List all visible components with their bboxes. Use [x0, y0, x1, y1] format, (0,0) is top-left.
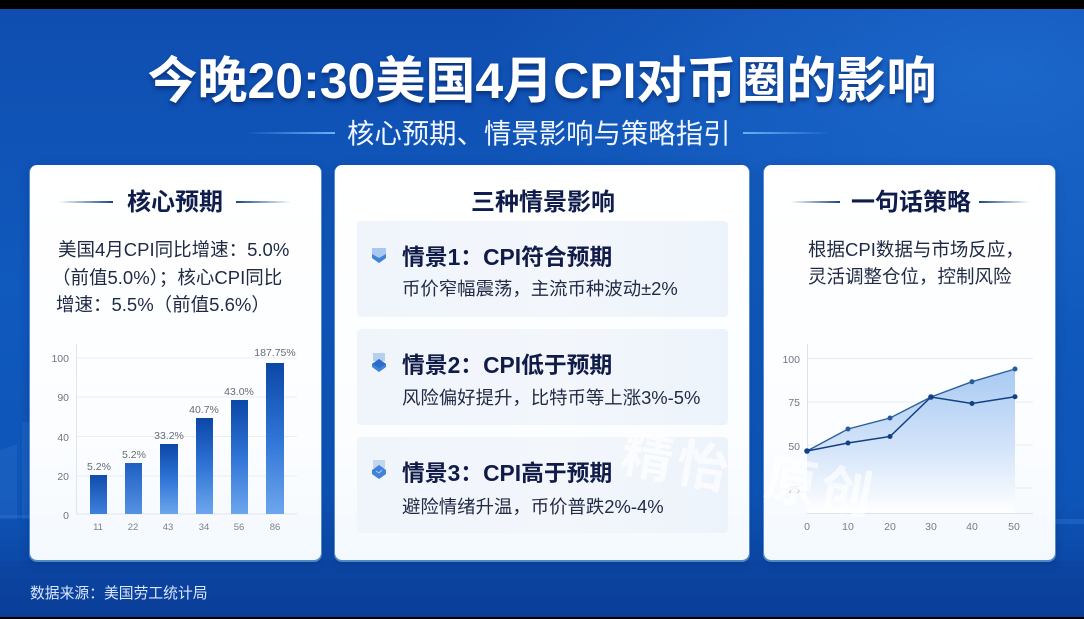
subtitle: 核心预期、情景影响与策略指引 — [347, 118, 730, 149]
bar value labels: 43.0% — [224, 386, 254, 398]
x axis labels: 0 — [804, 521, 810, 533]
text: forecast line 3: 增速：5.5%（前值5.6%） — [56, 294, 270, 315]
bar value labels: 33.2% — [154, 430, 184, 442]
y axis labels: 20 — [57, 471, 69, 483]
x axis labels: 43 — [163, 522, 173, 533]
bar value labels: 5.2% — [122, 449, 146, 461]
x axis labels: 34 — [199, 522, 209, 533]
x axis labels: 40 — [966, 521, 978, 533]
x axis labels: 22 — [128, 522, 138, 533]
y axis labels: 40 — [57, 432, 69, 444]
watermark: 精怡 原创 — [616, 425, 881, 527]
y axis labels: 50 — [788, 441, 800, 453]
bar value labels: 187.75% — [254, 347, 296, 359]
x axis labels: 86 — [270, 522, 280, 533]
y axis labels — [51, 353, 69, 522]
text: forecast line 2: （前值5.0%）；核心CPI同比 — [52, 267, 282, 288]
upper line series — [807, 366, 1018, 451]
x axis labels: 56 — [234, 522, 244, 533]
title: 今晚20:30美国4月CPI对币圈的影响 — [147, 53, 937, 109]
line chart — [782, 344, 1033, 533]
scenario 1 — [357, 221, 728, 317]
y axis labels: 25 — [788, 484, 800, 496]
scenario 2 description: 风险偏好提升，比特币等上涨3%-5% — [402, 387, 700, 408]
bar value labels — [87, 347, 296, 473]
bars — [90, 363, 284, 514]
scenario 3 title: 情景3：CPI高于预期 — [402, 460, 612, 486]
icon: scenario 1 — [372, 248, 386, 263]
panel: core expectations — [30, 165, 321, 560]
x axis labels: 11 — [93, 522, 103, 533]
y axis labels: 100 — [782, 354, 800, 366]
bar value labels: 5.2% — [87, 461, 111, 473]
text: forecast line 1: 美国4月CPI同比增速：5.0% — [58, 239, 289, 260]
scenario 3 — [357, 437, 728, 533]
x axis labels: 20 — [884, 521, 896, 533]
icon: scenario 2 — [372, 353, 386, 372]
x axis labels — [93, 522, 280, 533]
panel: one-line strategy — [764, 165, 1055, 560]
heading: one-line strategy: 一句话策略 — [851, 189, 971, 216]
text: strategy line 1: 根据CPI数据与市场反应， — [808, 239, 1024, 260]
scenario 3 description: 避险情绪升温，币价普跌2%-4% — [402, 496, 664, 517]
bar value labels: 40.7% — [189, 404, 219, 416]
x axis labels: 50 — [1008, 521, 1020, 533]
area fill — [807, 369, 1015, 513]
x axis labels: 30 — [925, 521, 937, 533]
scenario 2 — [357, 329, 728, 425]
y axis labels — [782, 354, 800, 496]
heading: core expectations: 核心预期 — [127, 189, 223, 216]
scenario 1 title: 情景1：CPI符合预期 — [402, 244, 612, 270]
heading: three scenarios: 三种情景影响 — [471, 189, 615, 216]
text: strategy line 2: 灵活调整仓位，控制风险 — [808, 266, 1012, 287]
icon: scenario 3 — [372, 460, 386, 479]
scenario 2 title: 情景2：CPI低于预期 — [402, 352, 612, 378]
x axis labels: 10 — [842, 521, 854, 533]
scenario 1 description: 币价窄幅震荡，主流币种波动±2% — [402, 278, 678, 299]
y axis labels: 100 — [51, 353, 69, 365]
y axis labels: 75 — [788, 397, 800, 409]
data source: 数据来源：美国劳工统计局 — [30, 586, 208, 602]
x axis labels — [804, 521, 1020, 533]
lower line series — [804, 394, 1018, 454]
y axis labels: 90 — [57, 392, 69, 404]
panel: three scenarios — [335, 165, 749, 560]
y axis labels: 0 — [63, 510, 69, 522]
bar chart — [51, 344, 297, 533]
